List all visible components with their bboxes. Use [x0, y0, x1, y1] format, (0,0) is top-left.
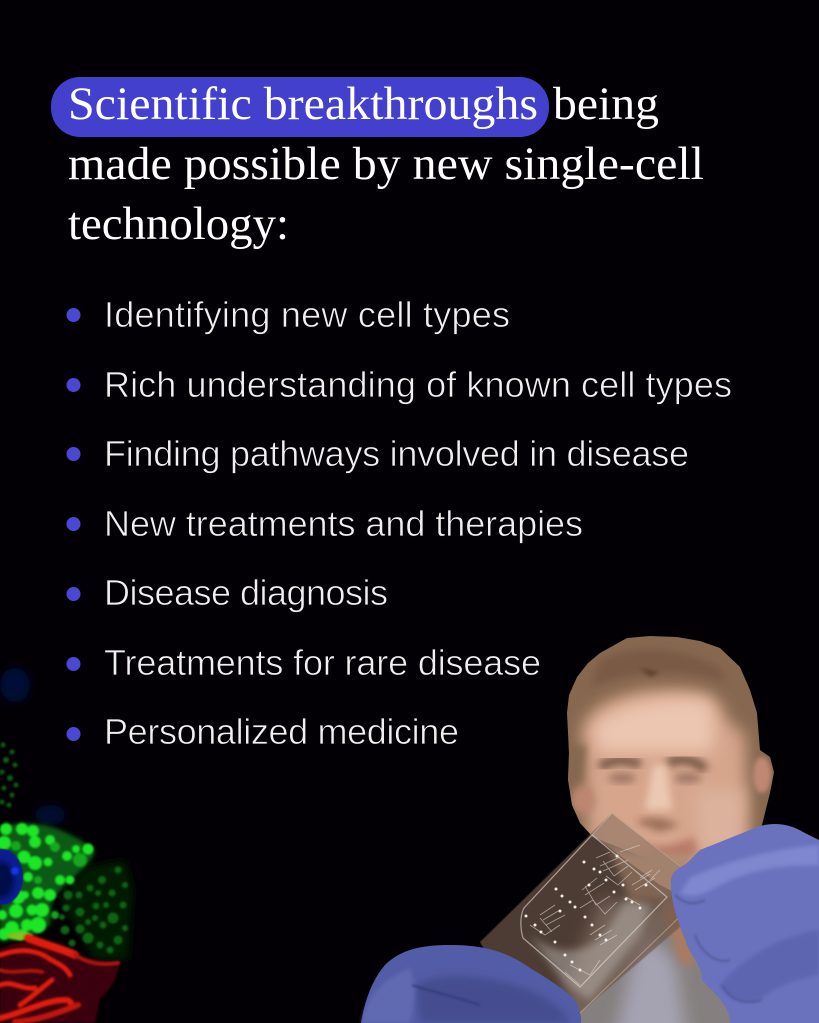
- torso: [540, 900, 770, 1023]
- microscopy image of cells: [0, 668, 133, 1023]
- bright green cell: [0, 823, 95, 942]
- bullet list: [66, 294, 732, 752]
- chip dots: [524, 854, 648, 972]
- dim green cell, upper left: [0, 742, 18, 808]
- nose and mouth: [645, 765, 672, 810]
- list item 7: Personalized medicine: [104, 711, 459, 752]
- eyes: [608, 773, 636, 783]
- list item 1: Identifying new cell types: [104, 294, 510, 335]
- blue nucleus: [0, 849, 23, 905]
- heading: Scientific breakthroughs: [68, 78, 538, 130]
- dim blue blobs: [0, 668, 65, 825]
- dim green cell, right: [60, 860, 133, 960]
- list item 5: Disease diagnosis: [104, 572, 388, 613]
- heading: made possible by new single-cell: [68, 138, 704, 190]
- list item 3: Finding pathways involved in disease: [104, 433, 689, 474]
- heading highlight pill: [51, 77, 549, 137]
- chip channels: [530, 845, 655, 985]
- head: [567, 636, 774, 865]
- left glove: [361, 945, 581, 1023]
- heading: [68, 78, 704, 250]
- list item 6: Treatments for rare disease: [104, 642, 541, 683]
- neck below face: [610, 850, 690, 900]
- brows: [600, 760, 640, 767]
- glass slide: [480, 813, 688, 1013]
- right glove: [671, 824, 819, 1023]
- red fibres: [0, 935, 120, 1023]
- heading: being: [553, 78, 659, 130]
- heading: technology:: [68, 198, 289, 250]
- list item 4: New treatments and therapies: [104, 503, 583, 544]
- list item 2: Rich understanding of known cell types: [104, 364, 732, 405]
- photo: researcher holding a microfluidic chip: [361, 630, 819, 1023]
- microfluidic chip: [521, 835, 667, 987]
